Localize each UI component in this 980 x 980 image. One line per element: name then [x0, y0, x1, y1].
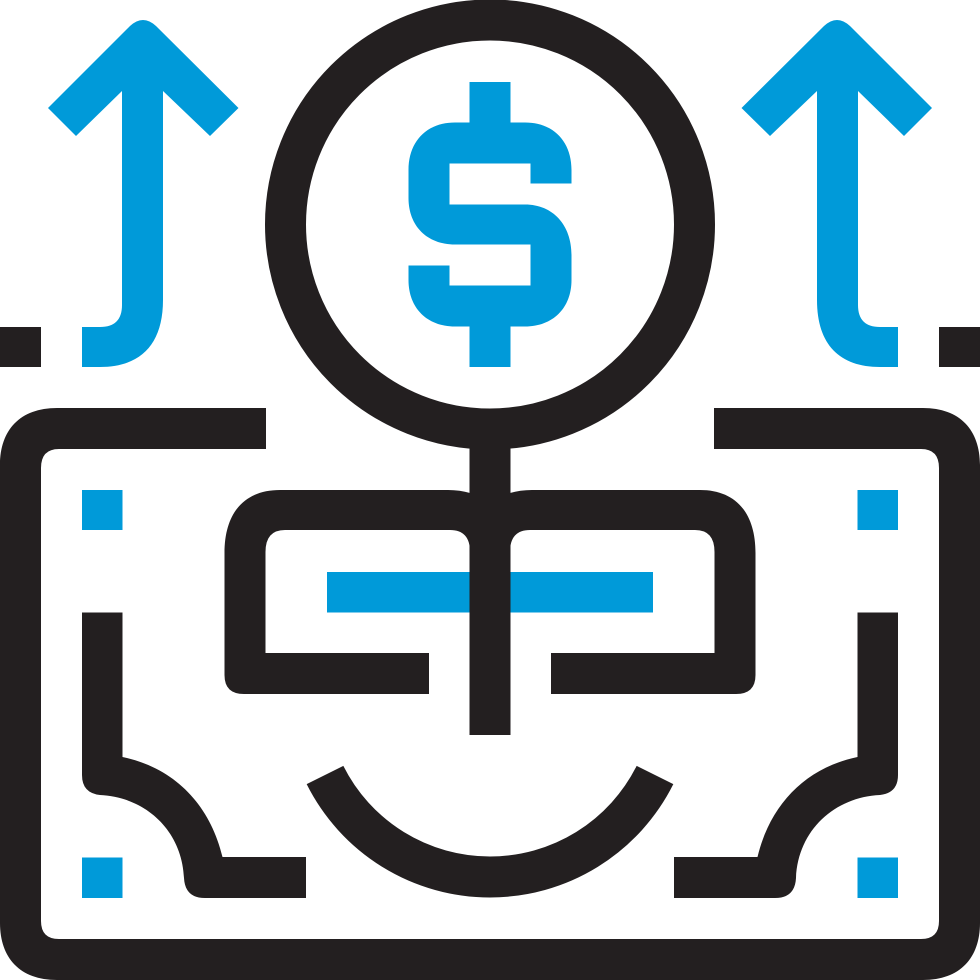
icon: left dash: [0, 327, 41, 367]
icon: dollar sign: [408, 82, 572, 367]
icon: plant sprout: [224, 440, 756, 735]
icon: left note ornament: [82, 612, 306, 898]
icon: blue centre bar: [327, 572, 653, 612]
icon: blue corner squares: [82, 490, 898, 898]
panel: banknote frame: [0, 408, 980, 980]
icon: bottom smile arc: [325, 775, 655, 877]
icon: coin circle: [286, 20, 694, 429]
icon: left up arrow: [48, 20, 238, 367]
icon: right note ornament: [674, 612, 898, 898]
icon: right up arrow: [742, 20, 932, 367]
icon: right dash: [939, 327, 980, 367]
